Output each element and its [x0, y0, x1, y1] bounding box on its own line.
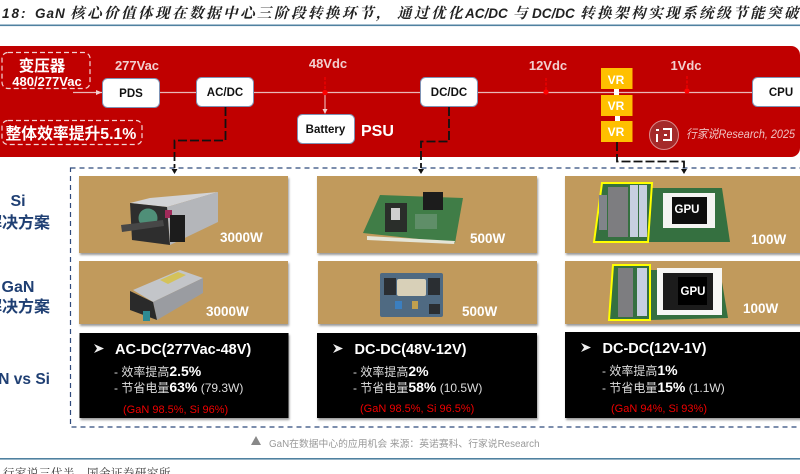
- panel: AC-DC result: [80, 333, 288, 418]
- panel: AC-DC result: AC-DC(277Vac-48V): [115, 342, 251, 358]
- watermark: [650, 120, 795, 150]
- panel: GaN AC-DC card: [79, 261, 288, 324]
- panel: Si 12V-1V card: GPU: [675, 204, 699, 216]
- panel: DC-DC 48V-12V result: (GaN 98.5%, Si 96.5%): [360, 403, 474, 415]
- callout: transformer: 变压器: [19, 56, 66, 75]
- arrow: VR to card: [617, 142, 687, 174]
- callout: transformer: [2, 52, 90, 89]
- voltage tap points: [322, 76, 690, 114]
- row labels: GaN: [2, 279, 34, 296]
- title: 核心价值体现在数据中心三阶段转换环节，: [70, 2, 393, 23]
- voltage labels: 48Vdc: [309, 56, 347, 71]
- voltage labels: 277Vac: [115, 58, 159, 73]
- panel: GaN 12V-1V card: GPU: [681, 286, 705, 298]
- panel: GaN 48V-12V card: 500W: [462, 304, 498, 319]
- callout: transformer: 480/277Vac: [12, 74, 82, 89]
- title: 18:: [2, 6, 28, 21]
- panel: Si 12V-1V card: 100W: [751, 232, 787, 247]
- panel: Si AC-DC card: 3000W: [220, 230, 263, 245]
- node: AC/DC: [196, 78, 254, 106]
- title: 转换架构实现系统级节能突破: [580, 2, 800, 23]
- node: VR stack: [601, 68, 632, 142]
- node: Battery: Battery: [306, 124, 346, 136]
- node: VR stack: VR: [608, 125, 625, 139]
- icon: bullet arrow: [94, 344, 104, 353]
- title: DC/DC: [532, 6, 575, 21]
- panel: DC-DC 12V-1V result: (GaN 94%, Si 93%): [611, 403, 707, 415]
- voltage labels: [115, 56, 702, 73]
- arrow: DC/DC to card: [418, 107, 449, 174]
- node: CPU: [752, 78, 800, 106]
- panel: AC-DC result: (GaN 98.5%, Si 96%): [123, 404, 228, 416]
- node: PDS: [102, 78, 160, 108]
- panel: AC-DC result: - 节省电量63% (79.3W): [114, 379, 243, 395]
- node: DC/DC: DC/DC: [431, 87, 467, 99]
- icon: server power supply: [121, 192, 218, 245]
- title: AC/DC: [464, 6, 508, 21]
- panel: GaN 12V-1V card: 100W: [743, 301, 779, 316]
- node: CPU: CPU: [769, 87, 793, 99]
- label: PSU: PSU: [361, 123, 394, 140]
- panel: DC-DC 48V-12V result: - 节省电量58% (10.5W): [353, 379, 482, 395]
- panel: Si 12V-1V card: [565, 176, 800, 253]
- title: 与: [513, 2, 530, 23]
- panel: DC-DC 12V-1V result: DC-DC(12V-1V): [602, 341, 707, 357]
- panel: red power chain: [0, 46, 800, 157]
- icon: GaN GPU board: [609, 265, 728, 320]
- icon: GaN power supply: [130, 270, 203, 321]
- title: [0, 2, 800, 26]
- voltage labels: 1Vdc: [670, 58, 702, 73]
- icon: DC-DC module: [363, 192, 463, 244]
- node: Battery: [298, 114, 354, 144]
- node: DC/DC: [420, 78, 478, 106]
- panel: AC-DC result: - 效率提高2.5%: [114, 363, 202, 379]
- panel: GaN 48V-12V card: [318, 261, 537, 324]
- row labels: Si: [10, 193, 26, 210]
- icon: bullet arrow: [333, 344, 343, 353]
- callout: overall efficiency: [2, 120, 142, 144]
- voltage labels: 12Vdc: [529, 58, 567, 73]
- panel: Si 48V-12V card: [317, 176, 537, 253]
- caption: GaN在数据中心的应用机会 来源：英诺赛科、行家说Research: [269, 437, 540, 450]
- node: VR stack: VR: [608, 99, 625, 113]
- panel: DC-DC 48V-12V result: [317, 333, 537, 418]
- callout: overall efficiency: 整体效率提升5.1%: [6, 124, 136, 143]
- node: AC/DC: AC/DC: [207, 87, 243, 99]
- icon: GaN module: [380, 273, 443, 317]
- icon: GPU board: [594, 183, 730, 242]
- panel: dashed comparison frame: [70, 168, 800, 427]
- row labels: [0, 193, 50, 388]
- arrow: AC/DC to card: [172, 107, 226, 174]
- panel: DC-DC 48V-12V result: - 效率提高2%: [353, 363, 429, 379]
- panel: DC-DC 12V-1V result: - 效率提高1%: [602, 362, 678, 378]
- node: PDS: PDS: [119, 88, 143, 100]
- panel: DC-DC 12V-1V result: [565, 332, 800, 418]
- panel: GaN AC-DC card: 3000W: [206, 304, 249, 319]
- panel: GaN 12V-1V card: [565, 261, 800, 324]
- title: 通过优化: [397, 2, 465, 23]
- panel: Si 48V-12V card: 500W: [470, 231, 506, 246]
- panel: DC-DC 48V-12V result: DC-DC(48V-12V): [354, 342, 467, 358]
- panel: Si AC-DC card: [79, 176, 288, 253]
- icon: bullet arrow: [581, 343, 591, 352]
- panel: DC-DC 12V-1V result: - 节省电量15% (1.1W): [602, 379, 725, 395]
- title: GaN: [35, 6, 66, 21]
- node: VR stack: VR: [608, 73, 625, 87]
